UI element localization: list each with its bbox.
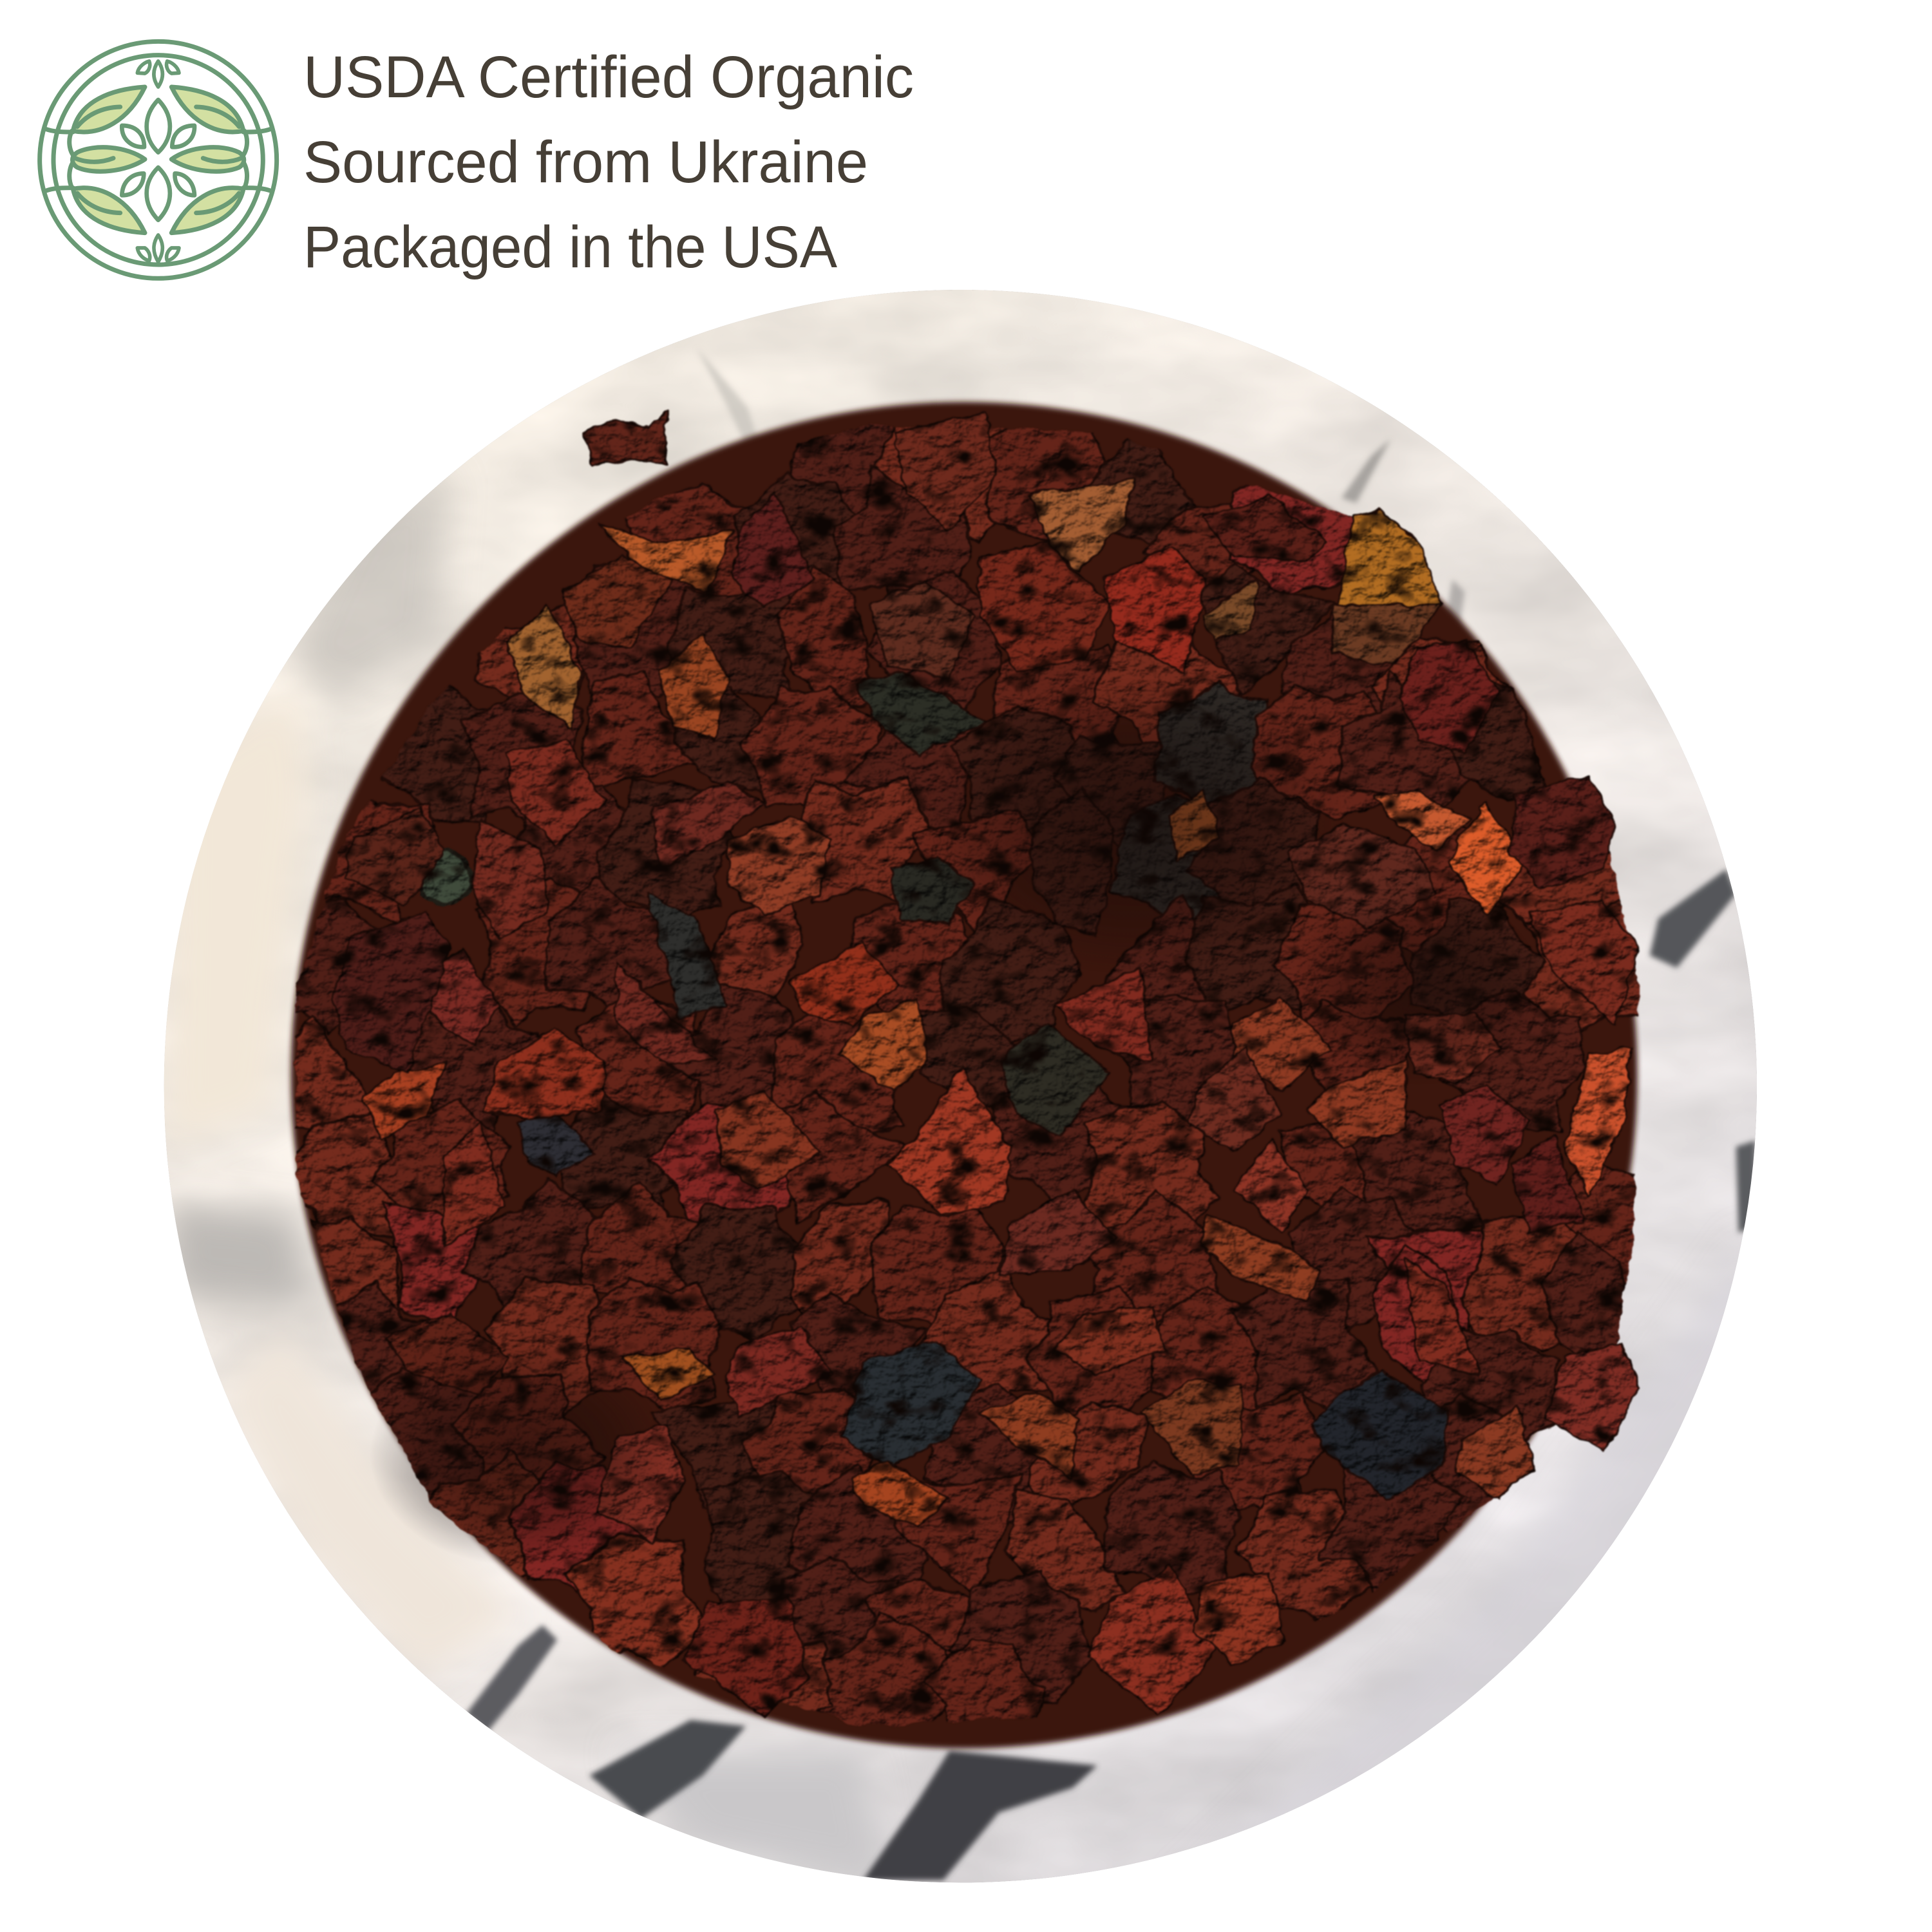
logo: circular leaf emblem [40,41,277,278]
centre petals [122,100,194,220]
outer ring [40,41,277,278]
line: Sourced from Ukraine: Sourced from Ukraine [303,129,868,195]
inner ring [53,55,263,265]
photo: bowl of dried rose hips [164,290,1763,1899]
ring cross bands and green leaves [45,87,271,233]
certification text block [303,44,914,280]
bowl interior shadow [291,402,1637,1748]
top and bottom sprigs [137,61,179,262]
base flake layer [231,363,1696,1788]
dried rose hip flakes [292,408,1641,1727]
marble bowl rim [164,290,1763,1899]
notable flakes [333,412,1640,1716]
dark shaded hollows in the flake pile [370,678,1541,1566]
line: Packaged in the USA: Packaged in the USA [303,214,838,280]
line: USDA Certified Organic: USDA Certified Organic [303,44,914,110]
